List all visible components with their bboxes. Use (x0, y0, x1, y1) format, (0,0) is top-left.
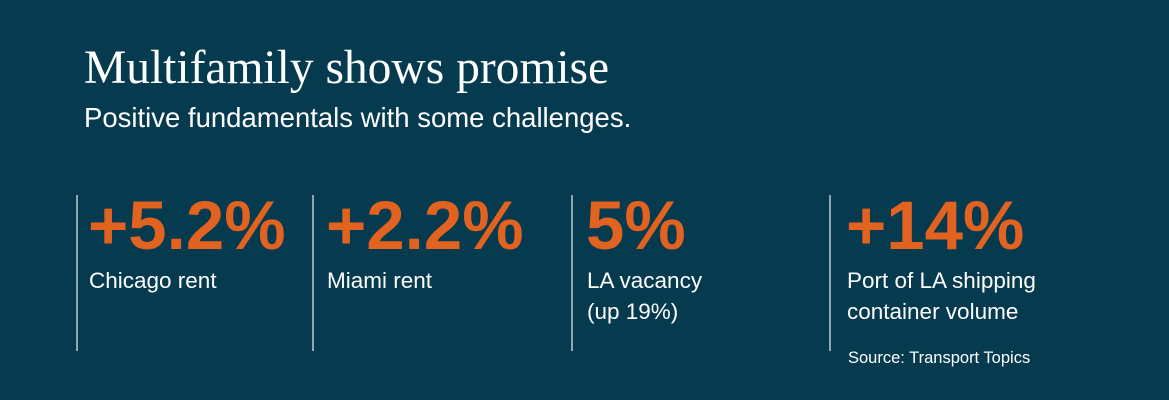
label: Chicago rent (89, 268, 217, 293)
number: +2.2% (326, 187, 524, 264)
number: +14% (846, 187, 1024, 264)
label (847, 268, 1036, 324)
subtitle: Positive fundamentals with some challenges. (84, 102, 631, 133)
title: Multifamily shows promise (84, 42, 609, 94)
source: Source: Transport Topics (848, 349, 1030, 367)
label: LA vacancy (587, 268, 702, 293)
label: Port of LA shipping (847, 268, 1036, 293)
stat: Port of LA (846, 187, 1036, 367)
label: (up 19%) (587, 299, 678, 324)
number: +5.2% (88, 187, 286, 264)
label (587, 268, 702, 324)
stat: LA vacancy (586, 187, 702, 324)
label: container volume (847, 299, 1018, 324)
stat: Miami rent (326, 187, 524, 293)
label: Miami rent (327, 268, 432, 293)
number: 5% (586, 187, 686, 264)
stat: Chicago rent (88, 187, 286, 293)
